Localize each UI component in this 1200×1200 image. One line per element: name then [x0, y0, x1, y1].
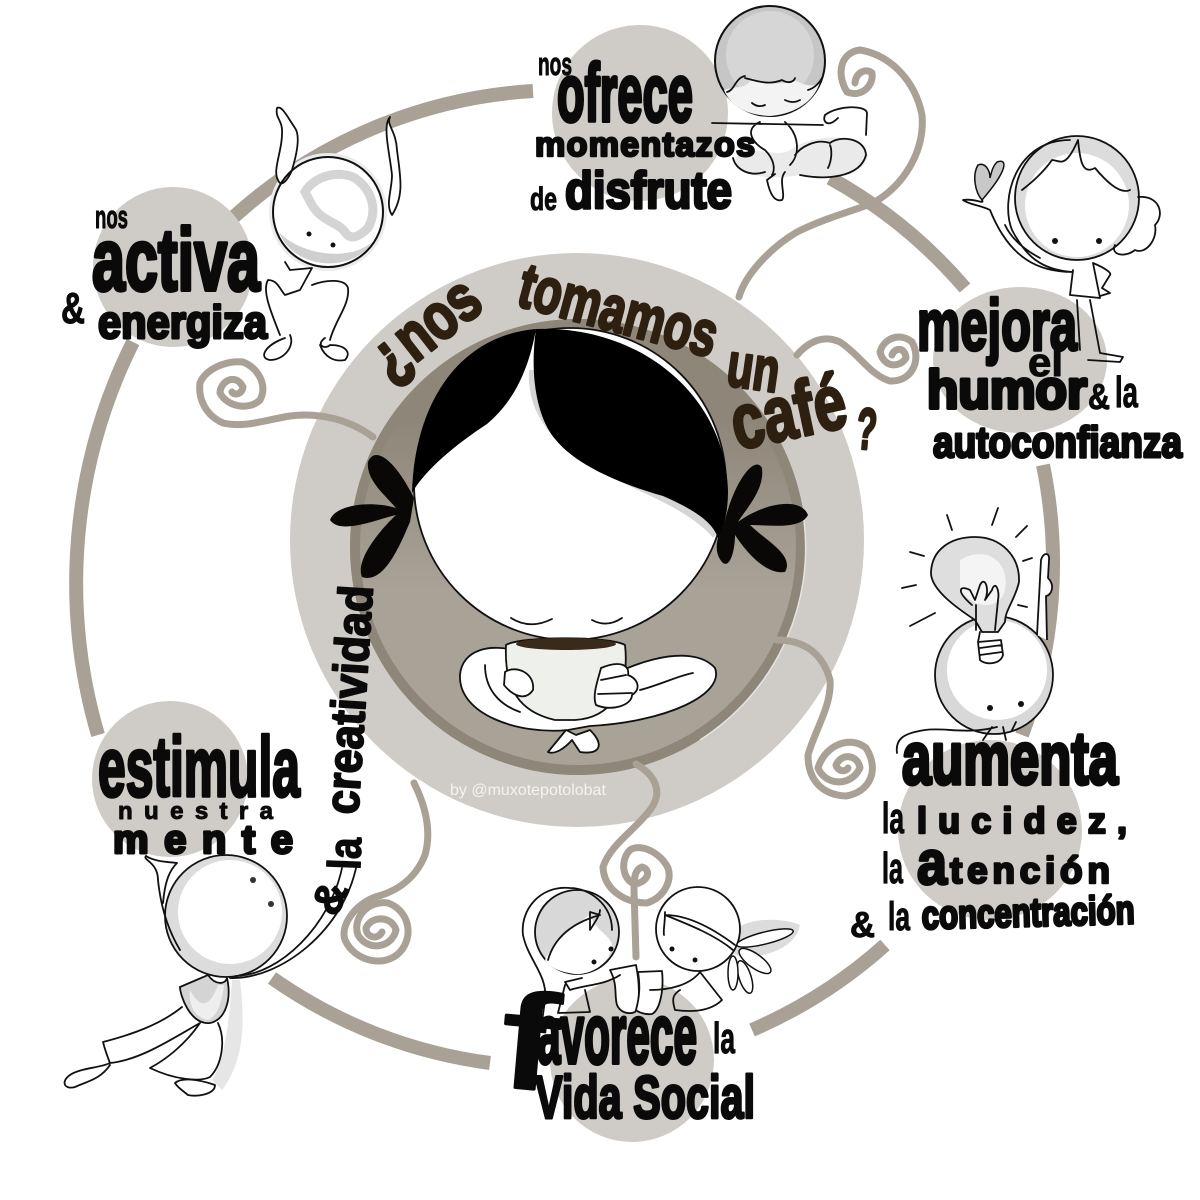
character: waving with heart	[963, 136, 1160, 362]
section: mejora el humor y la autoconfianza: &	[1088, 376, 1110, 417]
section: favorece la vida social: avorece	[537, 987, 697, 1081]
section: estimula nuestra mente y la creatividad: estimula	[98, 720, 301, 814]
girl head and hair	[330, 328, 808, 640]
section: nos ofrece momentazos de disfrute: de	[530, 181, 557, 217]
section: aumenta la lucidez, la atencion y la concentracion: a	[917, 829, 947, 898]
section: mejora el humor y la autoconfianza: humor	[927, 360, 1087, 420]
section: nos activa y energiza: energiza	[98, 296, 267, 348]
section: favorece la vida social	[495, 887, 800, 1142]
title: nos tomamos un café	[353, 249, 879, 467]
section: estimula nuestra mente y la creatividad: mente	[113, 818, 293, 862]
section: nos ofrece momentazos de disfrute	[530, 6, 868, 220]
section: estimula nuestra mente y la creatividad: creatividad	[316, 584, 384, 816]
section: mejora el humor y la autoconfianza: la	[1115, 368, 1138, 417]
section: estimula nuestra mente y la creatividad: nuestra	[118, 798, 274, 825]
character: arms raised	[264, 108, 400, 360]
title: nos tomamos un café: ¿nos	[353, 261, 495, 394]
section: nos activa y energiza: activa	[92, 210, 261, 309]
section: aumenta la lucidez, la atencion y la concentracion: la	[882, 794, 904, 843]
panel: central coffee cup	[290, 253, 864, 827]
section: aumenta la lucidez, la atencion y la concentracion: tención	[950, 850, 1110, 891]
section: mejora el humor y la autoconfianza: mejora	[917, 286, 1078, 366]
section: nos ofrece momentazos de disfrute: disfrute	[565, 162, 732, 220]
section: nos ofrece momentazos de disfrute: momentazos	[535, 126, 755, 164]
section: aumenta la lucidez, la atencion y la concentracion: la	[882, 844, 903, 893]
blob: ofrece	[552, 25, 728, 201]
blob: favorece	[550, 978, 714, 1142]
title: nos tomamos un café: café	[722, 356, 854, 467]
section: aumenta la lucidez, la atencion y la concentracion: aumenta	[902, 717, 1119, 800]
section: estimula nuestra mente y la creatividad: la	[318, 836, 371, 870]
connector swirls	[200, 50, 922, 961]
section: aumenta la lucidez, la atencion y la concentracion: la	[888, 895, 910, 939]
section: estimula nuestra mente y la creatividad: &	[302, 873, 358, 922]
blob: aumenta	[898, 740, 1082, 920]
blob: mejora	[933, 287, 1107, 433]
big ring	[76, 91, 1053, 1063]
title: nos tomamos un café: tomamos	[511, 249, 726, 371]
section: nos ofrece momentazos de disfrute: ofrece	[557, 48, 693, 139]
section: nos ofrece momentazos de disfrute: nos	[538, 46, 572, 82]
title: nos tomamos un café: ?	[854, 396, 879, 463]
characters: toasting friends	[523, 887, 800, 1022]
coffee cup with arms and crossed legs	[460, 638, 716, 753]
credit: by @muxotepotolobat	[450, 782, 606, 799]
character: reaching and leaping	[65, 855, 357, 1096]
character: lying with cup	[712, 6, 868, 200]
section: nos activa y energiza: &	[61, 284, 85, 333]
section: favorece la vida social: la	[713, 1014, 735, 1063]
title: nos tomamos un café: un	[723, 331, 784, 406]
section: favorece la vida social: f	[495, 964, 565, 1120]
blob: estimula	[92, 701, 248, 857]
section: aumenta la lucidez, la atencion y la concentracion: lucidez,	[917, 800, 1127, 841]
section: nos activa y energiza	[61, 108, 400, 360]
blob: activa	[93, 187, 253, 347]
character: light bulb head	[897, 508, 1053, 753]
section: aumenta la lucidez, la atencion y la concentracion	[850, 508, 1135, 945]
section: aumenta la lucidez, la atencion y la concentracion: concentración	[921, 888, 1135, 938]
section: mejora el humor y la autoconfianza: el	[1028, 341, 1063, 385]
section: aumenta la lucidez, la atencion y la concentracion: &	[850, 904, 875, 945]
section: favorece la vida social: Vida Social	[535, 1064, 755, 1131]
section: nos activa y energiza: nos	[95, 199, 128, 235]
section: estimula nuestra mente y la creatividad	[65, 584, 384, 1096]
section: mejora el humor y la autoconfianza	[917, 136, 1182, 467]
